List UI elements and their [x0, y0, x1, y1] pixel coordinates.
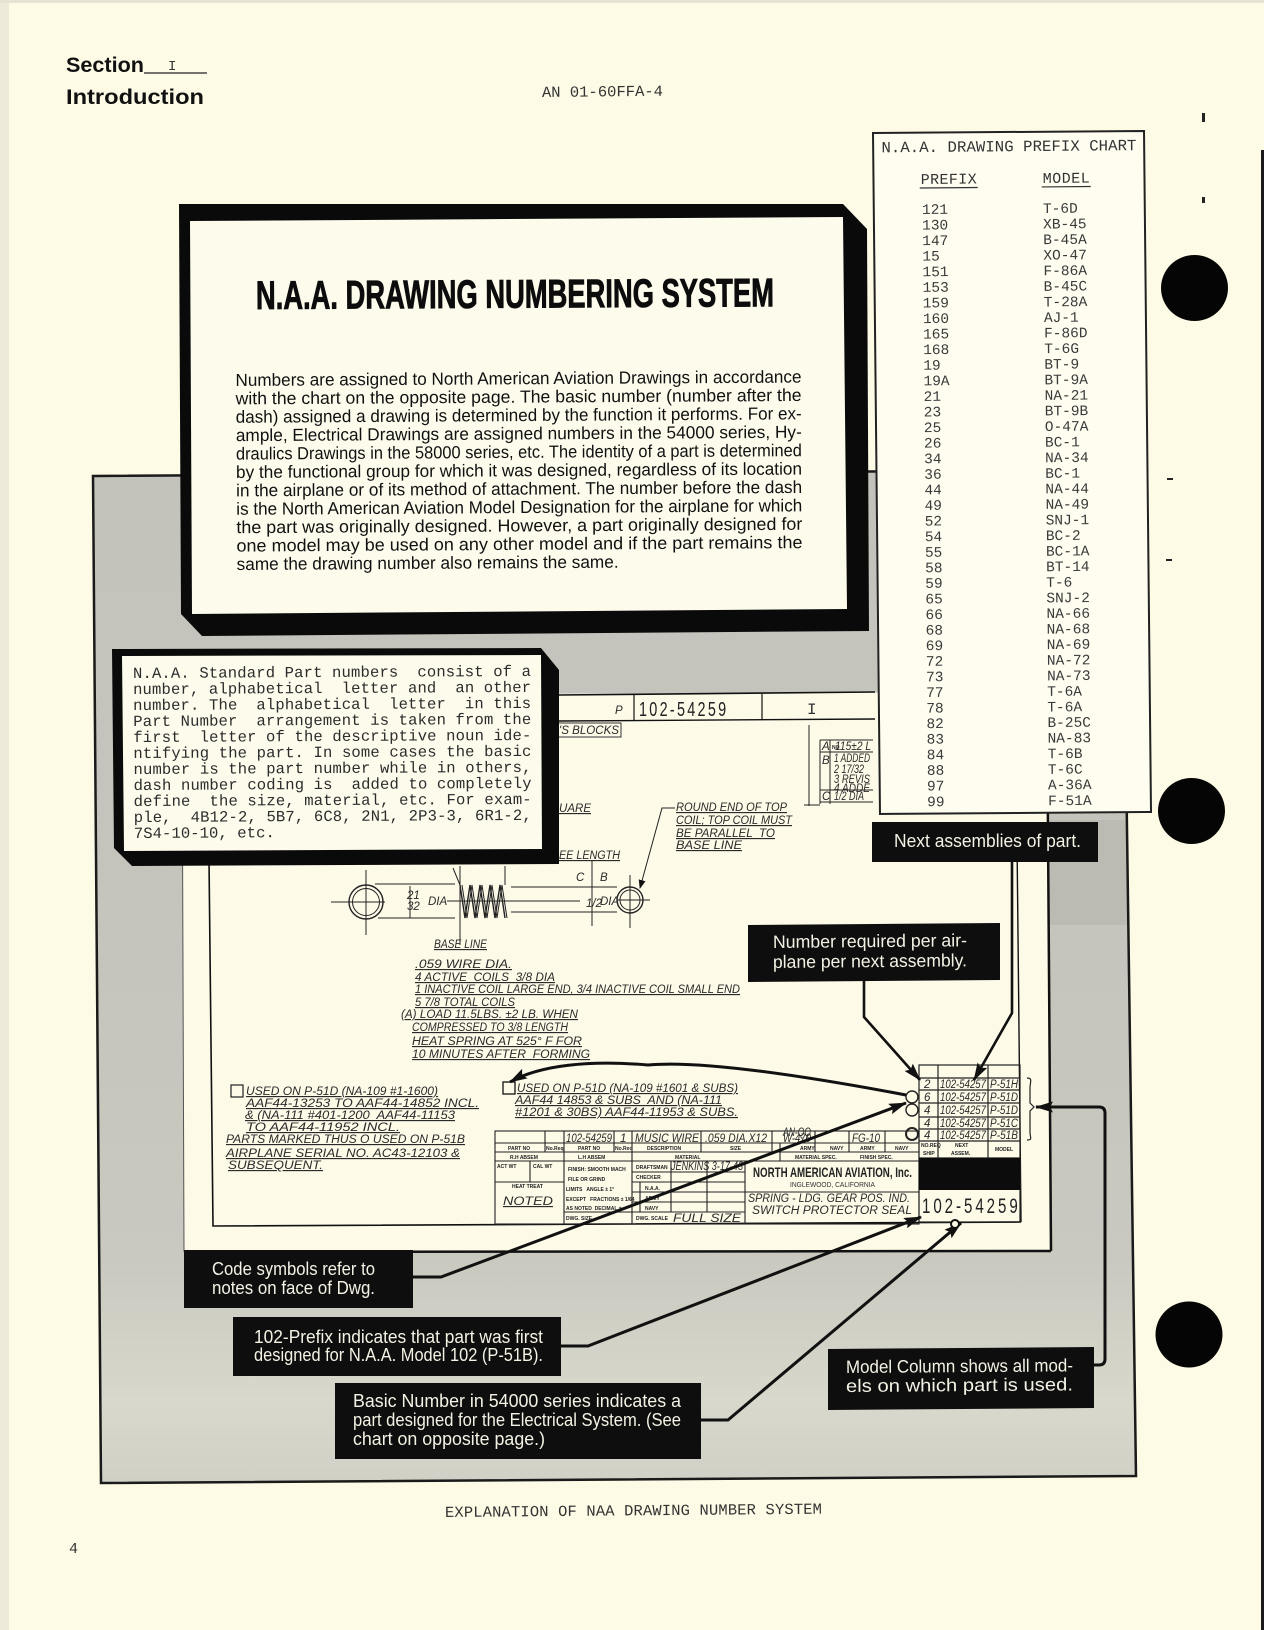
text block: description paragraph: the part was originally designed. However, a part originally designed for — [236, 514, 803, 537]
drawing: next assembly table: P-51D — [990, 1092, 1018, 1104]
column: prefixes: 165 — [923, 327, 949, 344]
drawing: title block: N.A.A. — [645, 1186, 661, 1192]
column: models: B-25C — [1047, 716, 1091, 732]
drawing: title block: NORTH AMERICAN AVIATION, Inc. — [753, 1164, 912, 1180]
column: prefixes: 54 — [925, 530, 942, 546]
column: prefixes: 168 — [923, 343, 949, 359]
column: models: T-6 — [1046, 576, 1072, 592]
drawing: next assembly table: P-51D — [990, 1105, 1018, 1117]
column header: model: MODEL — [1043, 171, 1090, 188]
text block: standard part explanation: number, alphabetical letter and an other — [133, 679, 531, 699]
drawing: title block: DWG. SCALE — [636, 1216, 669, 1222]
drawing: title block: FINISH: SMOOTH MACH — [568, 1167, 626, 1173]
drawing: title block: NAVY — [645, 1206, 659, 1212]
drawing: next assembly table: 102-54257 — [940, 1092, 987, 1104]
callout: prefix explanation: designed for N.A.A. Model 102 (P-51B). — [254, 1345, 543, 1365]
arrow: next assemblies callout — [974, 862, 1012, 1080]
column: models: T-28A — [1044, 295, 1088, 311]
drawing: spring specification notes: 10 MINUTES AFTER FORMING — [412, 1049, 590, 1061]
column: models: NA-44 — [1045, 482, 1089, 498]
drawing: title block: ARMY — [860, 1146, 875, 1152]
column: prefixes: 130 — [922, 218, 948, 235]
column: prefixes: 23 — [924, 405, 941, 421]
column: prefixes: 147 — [922, 234, 948, 250]
drawing: title block: ARMY — [645, 1196, 660, 1202]
drawing: title block: DWG. SIZE — [566, 1216, 593, 1222]
column: prefixes: 151 — [922, 265, 949, 281]
drawing: left code note: AAF44-13253 TO AAF44-14852 INCL. — [245, 1098, 479, 1110]
drawing: spring diagram: DIA — [428, 896, 448, 908]
drawing: spring specification notes: HEAT SPRING AT 525° F FOR — [412, 1036, 582, 1048]
column: models: T-6D — [1043, 202, 1078, 218]
column: prefixes: 159 — [923, 296, 949, 312]
drawing: left code note: AIRPLANE SERIAL NO. AC43-12103 & — [225, 1148, 460, 1160]
text block: standard part explanation: 7S4-10-10, etc. — [134, 824, 275, 843]
column: prefixes: 77 — [926, 686, 944, 702]
drawing: title block: AS NOTED DECIMAL ± — [566, 1206, 622, 1212]
column header: prefix: PREFIX — [921, 172, 977, 189]
drawing: revision table: 2 17/32 — [833, 764, 864, 776]
drawing: round end note — [640, 802, 793, 888]
drawing: spring specification notes: COMPRESSED TO 3/8 LENGTH — [412, 1022, 569, 1034]
text block: standard part explanation: dash number coding is added to completely — [134, 775, 532, 795]
column: models: BC-1 — [1045, 467, 1080, 483]
column: prefixes: 19A — [923, 374, 950, 390]
column: models: NA-69 — [1047, 638, 1090, 654]
text block: description paragraph: is the North American Aviation Model Designation for the airplane for which — [236, 495, 802, 519]
drawing: next assembly table: MODEL — [995, 1147, 1013, 1153]
drawing: middle code note: AAF44 14853 & SUBS AND (NA-111 — [514, 1095, 722, 1107]
drawing: title block: AN-QQ — [782, 1127, 811, 1139]
column: prefixes: 121 — [922, 203, 948, 219]
drawing: left code note: TO AAF44-11952 INCL. — [246, 1122, 400, 1134]
column: prefixes: 153 — [923, 281, 949, 297]
drawing: title block: No.Req — [615, 1146, 632, 1152]
binder hole: bottom — [1156, 1302, 1222, 1368]
drawing: revision table: B — [822, 755, 830, 767]
drawing: left code note — [225, 1085, 479, 1172]
drawing: left code note: & (NA-111 #401-1200 AAF44-11153 — [245, 1110, 456, 1122]
text block: description paragraph: in the airplane or of its method of attachment. The number before the dash — [236, 477, 802, 500]
callout: prefix explanation: 102-Prefix indicates that part was first — [254, 1327, 543, 1347]
drawing: title block: 102-54259 — [566, 1133, 613, 1145]
drawing: spring specification notes: (A) LOAD 11.5LBS. ±2 LB. WHEN — [401, 1009, 579, 1021]
column: prefixes: 34 — [924, 452, 942, 468]
column: prefixes: 49 — [924, 499, 942, 515]
drawing: left code note: USED ON P-51D (NA-109 #1-1600) — [246, 1086, 438, 1098]
drawing: title block: SIZE — [730, 1146, 742, 1152]
drawing: base line note: BASE LINE — [434, 939, 487, 951]
column: prefixes: 36 — [924, 468, 942, 484]
drawing: next assembly table: 4 — [924, 1130, 930, 1142]
drawing: title block: W-470 — [783, 1133, 811, 1145]
drawing: revision table: 115±2 L — [835, 741, 871, 753]
column: models: T-6B — [1048, 747, 1083, 763]
drawing: next assembly table: NEXT — [955, 1143, 968, 1149]
text block: description paragraph: with the chart on the opposite page. The basic number (number after the — [235, 385, 802, 408]
panel: standard part numbers — [112, 648, 559, 866]
drawing: title block: NAVY — [830, 1146, 844, 1152]
heading: numbering system: N.A.A. DRAWING NUMBERING SYSTEM — [256, 271, 774, 318]
drawing: next assembly table: 102-54257 — [940, 1105, 987, 1117]
drawing: next assembly table: 102-54257 — [940, 1079, 987, 1091]
drawing: title block: FULL SIZE — [673, 1213, 741, 1225]
column: models: NA-68 — [1047, 622, 1090, 639]
drawing: spring specification notes: .059 WIRE DIA. — [415, 959, 512, 971]
drawing: title block: .059 DIA.X12 — [705, 1133, 768, 1145]
column: models: NA-72 — [1047, 653, 1090, 670]
drawing: title block: LIMITS ANGLE ± 1° — [566, 1187, 614, 1193]
page number: 4 — [69, 1541, 78, 1558]
header: section label: I — [168, 59, 176, 75]
arrow: code symbol to drawing note — [510, 1063, 906, 1095]
drawing: title block: L.H ABSEM — [578, 1155, 605, 1161]
column: models: T-6A — [1047, 700, 1082, 717]
header: document number: AN 01-60FFA-4 — [542, 83, 663, 102]
text block: standard part explanation: number is the part number while in others, — [133, 759, 532, 779]
column: models: NA-34 — [1045, 451, 1089, 467]
column: prefixes: 78 — [926, 701, 944, 718]
text block: description paragraph: dash) assigned a drawing is determined by the function it performs. For ex- — [236, 403, 802, 427]
column: models: NA-73 — [1047, 669, 1091, 685]
column: models: BC-1 — [1045, 435, 1080, 452]
column: models: BC-1A — [1046, 544, 1090, 561]
column: models: F-86A — [1043, 264, 1087, 280]
column: prefixes: 19 — [923, 359, 941, 375]
column: models: B-45C — [1044, 279, 1088, 296]
column: models: BT-9 — [1044, 357, 1079, 374]
drawing: title block: PART NO — [578, 1146, 600, 1152]
drawing: title block: NAVY — [895, 1146, 909, 1152]
drawing: revision table — [804, 725, 873, 806]
drawing: title block: DESCRIPTION — [647, 1146, 682, 1152]
drawing: next assembly table: SHIP — [923, 1151, 935, 1157]
drawing: revision table: NO — [832, 745, 840, 751]
header: section label: Section — [66, 54, 144, 77]
drawing: title block: R.H ABSEM — [510, 1155, 538, 1161]
drawing: title block: PART NO — [508, 1146, 530, 1152]
column: prefixes: 26 — [924, 437, 941, 453]
drawing: spring diagram: 32 — [407, 901, 420, 913]
panel: grey background behind drawing — [93, 470, 1136, 1483]
heading: prefix chart title: N.A.A. DRAWING PREFIX CHART — [881, 137, 1136, 157]
column: prefixes: 58 — [925, 561, 943, 577]
column: prefixes: 68 — [926, 624, 943, 640]
callout: number required: plane per next assembly. — [773, 950, 967, 972]
drawing: revision table: 1/2 DIA — [834, 791, 864, 803]
drawing: title block: DRAFTSMAN — [636, 1165, 668, 1171]
callout: model column: Model Column shows all mod- — [846, 1355, 1073, 1377]
drawing: title block: ACT WT — [497, 1164, 516, 1170]
column: models: NA-66 — [1046, 607, 1090, 623]
drawing: next assembly table: ASSEM. — [951, 1151, 971, 1157]
drawing: left code note: SUBSEQUENT. — [228, 1160, 323, 1172]
column: prefixes: 25 — [924, 421, 941, 437]
drawing: title block: INGLEWOOD, CALIFORNIA — [790, 1182, 875, 1189]
drawing: spring specification notes: 1 INACTIVE COIL LARGE END, 3/4 INACTIVE COIL SMALL END — [415, 984, 740, 996]
panel: engineering drawing sheet: P — [615, 705, 623, 717]
drawing: middle code note: #1201 & 30BS) AAF44-11953 & SUBS. — [515, 1107, 738, 1119]
callout: basic number explanation: Basic Number in 54000 series indicates a — [353, 1391, 682, 1411]
drawing: blocks label: 'S BLOCKS — [559, 725, 619, 737]
callout: code symbols — [184, 1250, 413, 1308]
callout: basic number explanation — [335, 1383, 701, 1459]
caption: EXPLANATION OF NAA DRAWING NUMBER SYSTEM — [445, 1501, 822, 1522]
text block: standard part explanation: ntifying the part. In some cases the basic — [133, 743, 531, 763]
drawing: title block — [495, 1127, 919, 1225]
arrow: number required callout — [864, 981, 920, 1080]
callout: code symbols: Code symbols refer to — [212, 1259, 375, 1279]
column: prefixes: 52 — [925, 514, 942, 531]
arrow: code symbols to table — [413, 1103, 906, 1277]
column: models: NA-83 — [1048, 731, 1091, 748]
binder hole: middle — [1158, 778, 1225, 844]
header: section label — [66, 54, 207, 109]
drawing: title block: FINISH SPEC. — [860, 1155, 893, 1161]
drawing: title block: SPRING - LDG. GEAR POS. IND. — [748, 1193, 910, 1205]
callout: number required: Number required per air- — [773, 930, 967, 952]
drawing: next assembly table: NO.REQ — [921, 1143, 941, 1149]
column: prefixes: 69 — [926, 639, 943, 655]
column: models: BC-2 — [1046, 529, 1081, 545]
callout: prefix explanation — [233, 1317, 561, 1376]
column: prefixes: 65 — [925, 592, 943, 608]
column: models: BT-9B — [1045, 404, 1089, 420]
text block: description paragraph: same the drawing number also remains the same. — [237, 552, 619, 574]
column: prefixes: 99 — [927, 795, 945, 811]
drawing: next assembly table: P-51C — [990, 1118, 1019, 1130]
drawing: title block: MATERIAL SPEC. — [795, 1155, 837, 1161]
column: models: BT-14 — [1046, 560, 1090, 576]
column: prefixes: 21 — [924, 390, 941, 406]
drawing: next assembly table: 2 — [923, 1079, 931, 1091]
text block: standard part explanation: define the size, material, etc. For exam- — [134, 791, 532, 811]
drawing: spring diagram: C — [576, 872, 585, 884]
text block: description paragraph: ample, Electrical Drawings are assigned numbers in the 54000 series, Hy- — [236, 422, 802, 445]
drawing: title block: MUSIC WIRE — [635, 1133, 699, 1145]
drawing: left code note: PARTS MARKED THUS O USED ON P-51B — [226, 1134, 465, 1146]
drawing: free length note: EE LENGTH — [559, 850, 621, 862]
drawing: next assembly table: 102-54259 — [922, 1193, 1018, 1218]
drawing: title block: EXCEPT FRACTIONS ± 1/64 — [566, 1197, 635, 1203]
text block: standard part explanation — [133, 663, 532, 843]
drawing: revision table: A — [821, 741, 830, 753]
column: models: NA-21 — [1045, 389, 1088, 405]
drawing: spring specification notes: 5 7/8 TOTAL COILS — [415, 997, 515, 1009]
drawing: spring diagram: 1/2 — [586, 898, 603, 910]
column: prefixes: 59 — [925, 577, 943, 593]
arrow: basic number callout to drawing number — [701, 1220, 961, 1420]
drawing: revision table: 1 ADDED — [834, 753, 870, 765]
drawing: spring diagram: B — [600, 872, 608, 884]
drawing: next assembly table: P-51B — [990, 1130, 1018, 1142]
column: models: XO-47 — [1043, 248, 1087, 265]
text block: description paragraph: Numbers are assigned to North American Aviation Drawings in accordance — [235, 367, 802, 390]
column: prefixes: 72 — [926, 655, 943, 671]
column: models: NA-49 — [1045, 498, 1089, 514]
column: prefixes: 15 — [922, 250, 940, 266]
column: prefixes: 82 — [926, 717, 944, 733]
drawing: middle code note — [503, 1082, 738, 1119]
column: models: A-36A — [1048, 778, 1092, 794]
column: prefixes: 73 — [926, 670, 944, 686]
column: models: F-86D — [1044, 326, 1088, 343]
column: models: T-6C — [1048, 763, 1083, 779]
column: prefixes: 83 — [927, 733, 944, 749]
drawing: spring diagram — [331, 860, 650, 945]
arrow: prefix callout to drawing number — [561, 1217, 921, 1346]
drawing: next assembly table: 4 — [924, 1105, 930, 1117]
drawing: round end note: BASE LINE — [676, 840, 742, 852]
drawing: spring specification notes: 4 ACTIVE COILS 3/8 DIA — [415, 972, 555, 984]
drawing: title block: FILE OR GRIND — [568, 1177, 606, 1183]
panel: numbering system description — [179, 204, 869, 636]
callout: basic number explanation: chart on opposite page.) — [353, 1429, 545, 1449]
drawing: revision table: 4 ADDE — [834, 783, 870, 795]
callout: basic number explanation: part designed for the Electrical System. (See — [353, 1410, 681, 1430]
column: models: AJ-1 — [1044, 311, 1079, 327]
drawing: title block: 1 — [620, 1133, 626, 1145]
text block: standard part explanation: ple, 4B12-2, 5B7, 6C8, 2N1, 2P3-3, 6R1-2, — [134, 807, 532, 827]
drawing: title block: MATERIAL — [675, 1155, 700, 1161]
column: models: O-47A — [1045, 420, 1089, 436]
column: prefixes: 88 — [927, 764, 944, 780]
binder hole: top — [1161, 255, 1228, 321]
column: models: SNJ-2 — [1046, 591, 1090, 607]
column: models: B-45A — [1043, 233, 1087, 249]
drawing: title block: SWITCH PROTECTOR SEAL — [752, 1205, 912, 1217]
column: models: T-6A — [1047, 685, 1082, 701]
text block: description paragraph: draulics Drawings in the 58000 series, etc. The identity of a part is determined — [236, 440, 802, 464]
text block: standard part explanation: number. The alphabetical letter in this — [133, 695, 531, 715]
column: prefixes: 55 — [925, 546, 942, 562]
text block: standard part explanation: N.A.A. Standard Part numbers consist of a — [133, 663, 531, 683]
callout: model column: els on which part is used. — [846, 1374, 1073, 1396]
drawing: next assembly table: 4 — [924, 1118, 930, 1130]
drawing: spring diagram: DIA — [600, 896, 620, 908]
drawing: next assembly table: 102-54257 — [940, 1118, 987, 1130]
drawing: next assembly table: P-51H — [990, 1079, 1019, 1091]
callout: next assemblies — [872, 822, 1098, 862]
column: models — [1043, 202, 1092, 810]
drawing: revision table: C — [822, 791, 831, 803]
drawing: next assembly table: 102-54257 — [940, 1130, 987, 1142]
arrow: model column callout — [1036, 1107, 1105, 1365]
drawing: round end note: COIL; TOP COIL MUST — [676, 815, 793, 827]
drawing: revision table: 3 REVIS — [834, 774, 870, 786]
callout: next assemblies: Next assemblies of part. — [894, 831, 1081, 851]
drawing: title block: JENKINS 3-17-43 — [670, 1161, 743, 1173]
text block: description paragraph: by the functional group for which it was designed, regardless of its location — [236, 459, 802, 482]
drawing: title block: CAL WT — [533, 1164, 552, 1170]
drawing: title block: No.Req — [546, 1146, 564, 1152]
column: prefixes: 84 — [927, 748, 944, 764]
drawing: middle code note: USED ON P-51D (NA-109 #1601 & SUBS) — [517, 1083, 738, 1095]
text block: description paragraph — [234, 367, 803, 574]
column: prefixes: 97 — [927, 779, 944, 795]
column: prefixes: 160 — [923, 312, 949, 328]
panel: engineering drawing sheet — [182, 692, 1051, 1252]
text block: standard part explanation: Part Number arrangement is taken from the — [133, 711, 531, 731]
drawing: title block: NOTED — [503, 1196, 553, 1208]
column: models: F-51A — [1048, 794, 1092, 810]
panel: prefix chart — [873, 131, 1151, 814]
drawing: round end note: BE PARALLEL TO — [676, 828, 775, 840]
drawing: next assembly table: 6 — [924, 1092, 931, 1104]
drawing: spring specification notes — [401, 959, 740, 1061]
drawing: title block: FG-10 — [852, 1133, 881, 1145]
column: models: SNJ-1 — [1046, 513, 1089, 530]
column: prefixes — [922, 203, 954, 811]
column: models: T-6G — [1044, 342, 1079, 358]
drawing: square note: UARE — [559, 803, 591, 815]
drawing: next assembly table — [906, 1065, 1034, 1222]
column: prefixes: 44 — [924, 483, 942, 499]
callout: code symbols: notes on face of Dwg. — [212, 1278, 375, 1298]
column: models: BT-9A — [1044, 373, 1088, 389]
text block: standard part explanation: first letter of the descriptive noun ide- — [133, 727, 531, 747]
panel: engineering drawing sheet: 102-54259 — [639, 698, 726, 721]
drawing: spring diagram: 21 — [406, 890, 420, 902]
callout: number required — [748, 923, 1000, 982]
panel: engineering drawing sheet: I — [807, 701, 817, 719]
drawing: round end note: ROUND END OF TOP — [676, 802, 787, 814]
drawing: title block: CHECKER — [636, 1175, 661, 1181]
drawing: title block: HEAT TREAT — [512, 1184, 543, 1190]
column: models: XB-45 — [1043, 217, 1087, 234]
drawing: title block: ARMY — [800, 1146, 815, 1152]
text block: description paragraph: one model may be used on any other model and if the part remains the — [236, 532, 803, 556]
header: section label: Introduction — [66, 86, 204, 109]
callout: model column — [828, 1347, 1094, 1410]
column: prefixes: 66 — [925, 608, 943, 624]
